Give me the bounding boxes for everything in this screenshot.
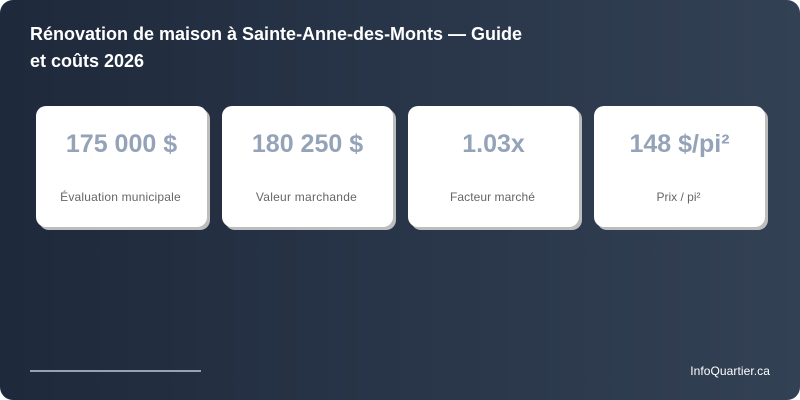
label: Évaluation municipale [60,190,181,204]
footer rule [30,370,201,372]
panel: prix au pied carré [594,106,765,227]
value: 148 $/pi² [629,130,730,158]
title: Rénovation de maison à Sainte-Anne-des-Monts — Guide [30,24,522,44]
title: et coûts 2026 [30,51,144,71]
label: Facteur marché [450,190,535,204]
label: Valeur marchande [256,190,357,204]
value: 175 000 $ [66,130,177,158]
value: 180 250 $ [252,130,363,158]
panel: évaluation municipale [36,106,207,227]
brand name: InfoQuartier.ca [690,364,770,378]
title [30,24,522,71]
value: 1.03x [462,130,525,158]
label: Prix / pi² [656,190,700,204]
panel: valeur marchande [222,106,393,227]
panel: facteur marché [408,106,579,227]
